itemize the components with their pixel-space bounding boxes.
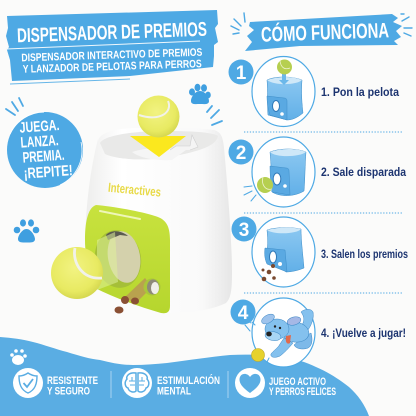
dog head [265, 319, 289, 339]
step 4 circle [252, 298, 315, 367]
badge: juega lanza premia repite: JUEGA. [19, 117, 60, 137]
badge: juega lanza premia repite: ¡REPITE! [23, 162, 73, 183]
title text: DISPENSADOR DE PREMIOS [17, 19, 207, 47]
step 1 [228, 56, 399, 126]
subtitle text [21, 47, 203, 76]
feature text: RESISTENTE [47, 375, 98, 387]
product: treat dispenser [51, 96, 232, 314]
number badge 2: 2 [236, 143, 246, 164]
feature text [157, 374, 220, 398]
treat chute and hole [125, 278, 152, 304]
feature text: Y SEGURO [47, 386, 90, 398]
step 4 motion lines [245, 320, 269, 362]
icon: paw left [14, 219, 39, 243]
feature text: JUEGO ACTIVO [269, 376, 326, 388]
step 1 ball [277, 60, 292, 74]
step 2 dispenser icon [270, 149, 306, 196]
sparkle lines right of paw [207, 106, 222, 125]
feature divider [227, 371, 229, 398]
badge: juega lanza premia repite [7, 112, 83, 188]
feature text: MENTAL [157, 386, 191, 398]
step 2 circle [252, 137, 315, 207]
dog tail [301, 309, 313, 330]
heading banner: como funciona [245, 14, 402, 51]
step 3 [232, 216, 408, 287]
feature text [47, 375, 98, 398]
launched ball glow [97, 232, 118, 290]
badge: juega lanza premia repite: LANZA. [20, 132, 59, 152]
green front panel [85, 205, 170, 313]
step 2 [228, 137, 406, 207]
number badge 1: 1 [236, 63, 247, 84]
feature divider [110, 371, 112, 398]
dotted separator [244, 292, 403, 294]
step 1 label: 1. Pon la pelota [321, 85, 399, 99]
icon: paw top [189, 84, 211, 104]
number badge 4 [230, 300, 256, 324]
dog eyes and nose [266, 325, 281, 336]
feature: juego activo [235, 368, 336, 398]
treats [114, 296, 139, 314]
banner divider [6, 41, 200, 49]
step 1 dispenser icon [267, 77, 303, 120]
step 3 dispenser icon [265, 228, 304, 272]
subtitle text: Y LANZADOR DE PELOTAS PARA PERROS [23, 58, 202, 76]
feature: estimulacion mental [122, 368, 220, 398]
subtitle text: DISPENSADOR INTERACTIVO DE PREMIOS [21, 47, 203, 64]
step 2 ball [257, 177, 273, 193]
step 4 dog [260, 309, 313, 357]
heading sparkles [231, 13, 412, 36]
number badge 3 [232, 216, 256, 242]
feature text: ESTIMULACIÓN [157, 374, 220, 387]
step 2 motion lines [244, 186, 256, 201]
icon: brain [122, 368, 152, 398]
dotted separator [244, 131, 403, 133]
sparkle lines left of badge [6, 98, 23, 115]
number badge 1 [228, 60, 254, 84]
step 1 arrow [279, 74, 289, 85]
dog muzzle [264, 330, 282, 342]
step 1 circle [252, 56, 315, 126]
top tennis ball [138, 96, 180, 138]
title banner [6, 10, 218, 84]
badge: juega lanza premia repite: PREMIA. [22, 147, 65, 167]
dog tongue [286, 335, 291, 344]
step 4 ball [252, 348, 264, 362]
feature: resistente y seguro [13, 368, 98, 398]
number badge 2 [228, 140, 254, 164]
number badge 3: 3 [239, 220, 249, 241]
dog body [279, 320, 311, 344]
icon: shield [13, 368, 43, 398]
icon: heart [235, 368, 265, 398]
bottom blue wave panel [0, 337, 369, 416]
banner underline [10, 79, 130, 84]
brand logo: Interactives [107, 180, 162, 200]
dog back leg [294, 333, 312, 349]
ball hole [90, 226, 146, 292]
dog ears [260, 312, 276, 326]
icon: small white paw [10, 349, 27, 365]
step 3 treats [262, 264, 276, 281]
dispenser body [85, 128, 232, 313]
dotted separator [244, 212, 403, 214]
launched tennis ball [51, 247, 103, 299]
step 3 circle [252, 217, 315, 287]
rim inner opening [100, 131, 218, 159]
feature text: Y PERROS FELICES [269, 386, 336, 398]
yellow arrow [130, 136, 186, 157]
step 4 [230, 298, 406, 367]
number badge 4: 4 [238, 303, 249, 324]
feature text [269, 376, 336, 398]
dog front leg [271, 338, 293, 357]
